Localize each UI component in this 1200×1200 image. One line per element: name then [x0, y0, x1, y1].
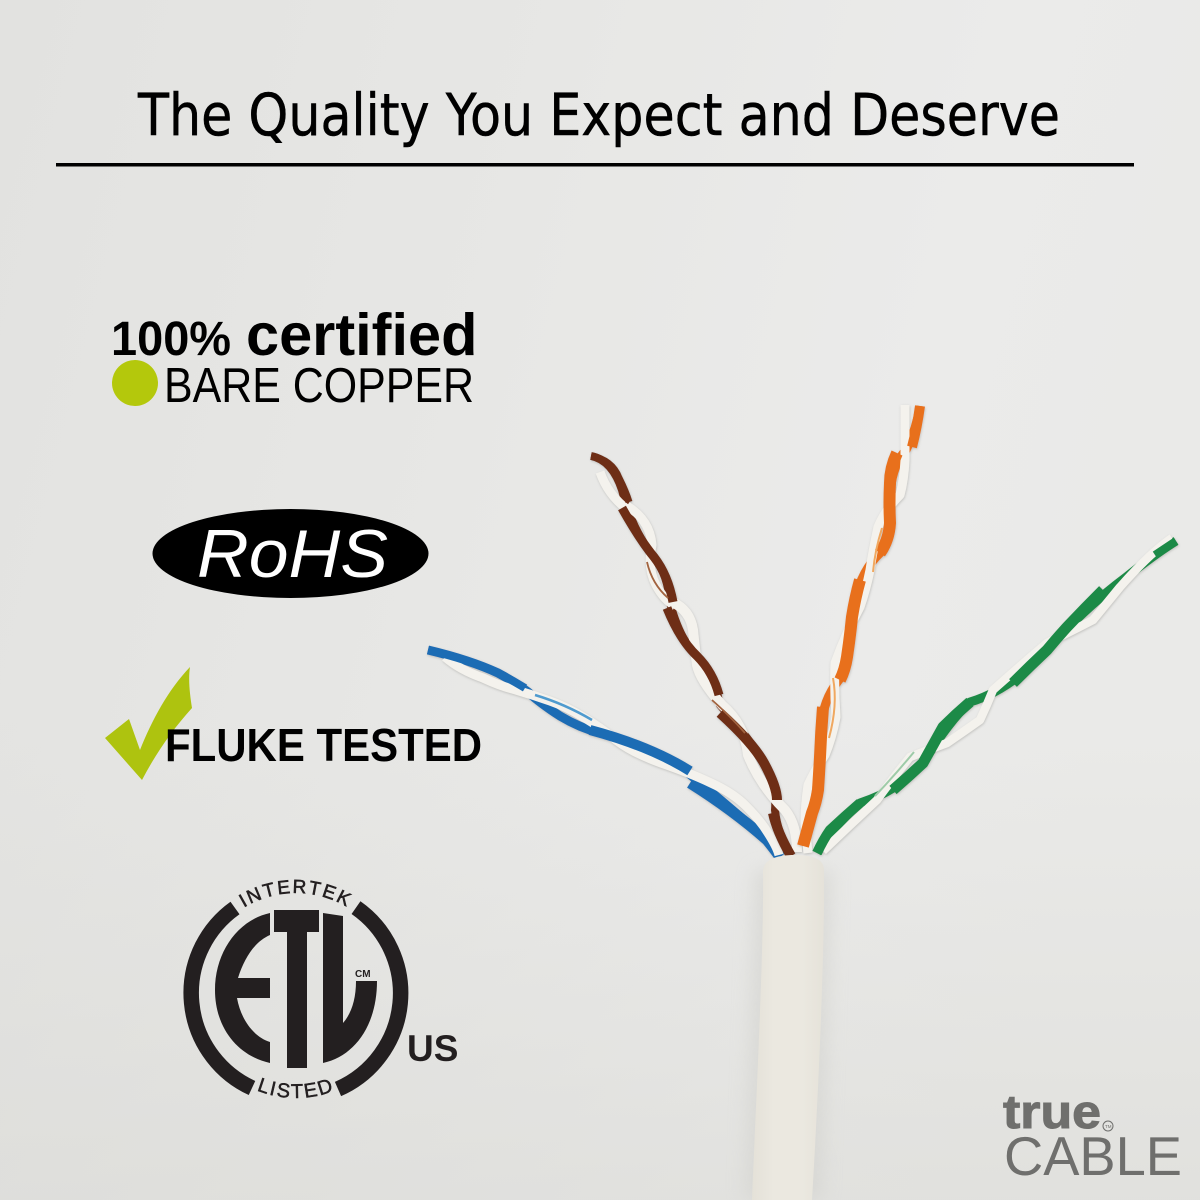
- wire pair: orange: [803, 405, 920, 853]
- letter T: [274, 910, 319, 1068]
- title: The Quality You Expect and Deserve: [137, 81, 1060, 149]
- wire pair: blue: [428, 650, 780, 857]
- icon: green dot: [112, 360, 158, 406]
- wordmark: CABLE: CABLE: [1004, 1125, 1182, 1187]
- text: US: US: [407, 1028, 458, 1069]
- wire pair: brown: [591, 456, 797, 856]
- icon: trademark: [1103, 1121, 1113, 1131]
- badge: RoHS: RoHS: [197, 516, 388, 592]
- icon: green check mark: [105, 667, 192, 780]
- wordmark: true: true: [1003, 1085, 1101, 1138]
- logo: trueCABLE: [1003, 1085, 1182, 1187]
- cable jacket: [752, 855, 824, 1200]
- text: bare copper: BARE COPPER: [164, 359, 474, 413]
- outer ring: [191, 908, 401, 1089]
- badge: 100% certified bare copper: [111, 301, 477, 413]
- text: CM: CM: [355, 969, 371, 980]
- badge: Fluke tested: [105, 667, 482, 780]
- text: Listed: LISTED: [258, 1078, 332, 1098]
- heading: 100% certified: certified: [246, 301, 477, 368]
- wire pair: green: [817, 538, 1176, 853]
- letter E: [215, 913, 270, 1063]
- text: fluke tested: FLUKE TESTED: [165, 719, 482, 771]
- letter L: [323, 913, 377, 1063]
- heading: 100% certified: 100%: [111, 313, 231, 366]
- logo: ETL listed mark: [183, 880, 458, 1098]
- badge: RoHS: [152, 509, 428, 598]
- cable shadow: [745, 870, 832, 1200]
- icon: trademark: TM: [1105, 1124, 1112, 1129]
- text: Intertek: INTERTEK: [238, 880, 352, 908]
